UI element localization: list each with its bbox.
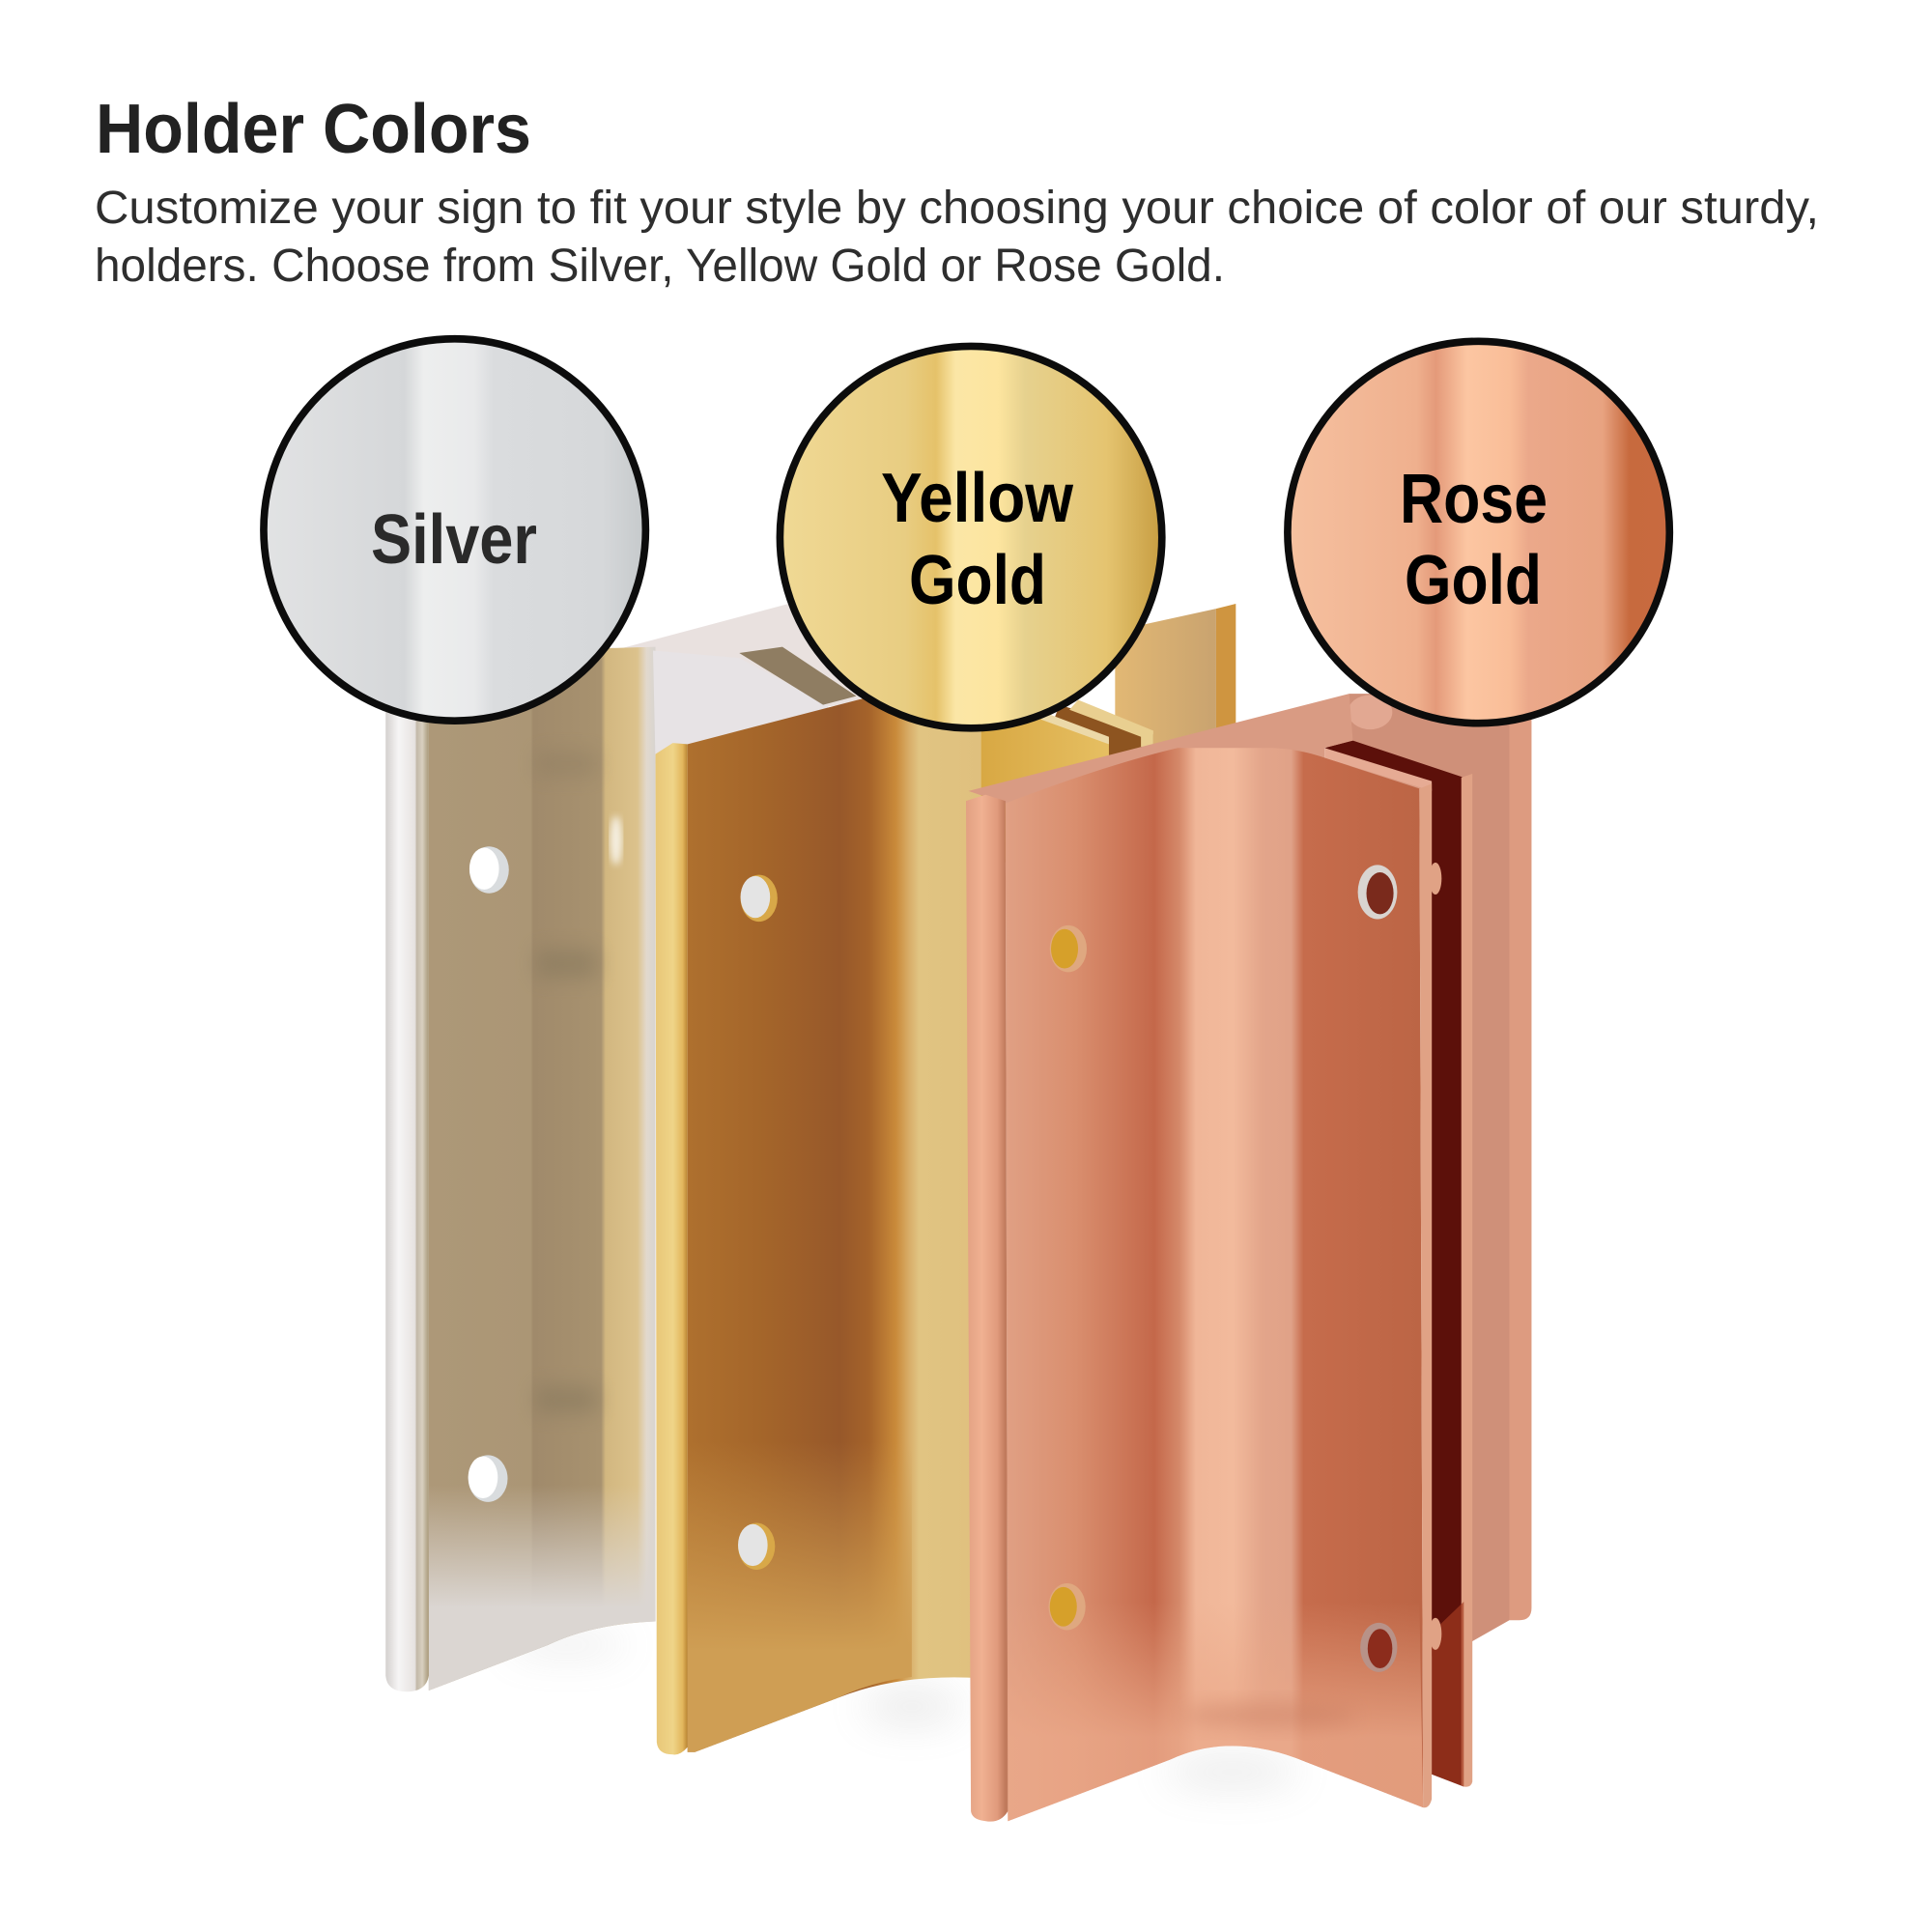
rose side bumps <box>1430 863 1441 1650</box>
rose lower left hole <box>1048 1583 1086 1630</box>
rose lower glow <box>1006 1602 1423 1821</box>
rose front lip <box>1324 748 1432 791</box>
label: silver: Silver <box>371 501 537 579</box>
label: yellow gold <box>881 460 1074 619</box>
rose lower right hole <box>1360 1623 1397 1672</box>
description text: holders. Choose from Silver, Yellow Gold or Rose Gold. <box>95 241 1225 292</box>
yellow upper right panel <box>980 702 1109 863</box>
yellow channel <box>1054 705 1153 761</box>
rose upper right hole <box>1358 865 1397 920</box>
yellow lower glow <box>688 1441 912 1752</box>
yellow front face <box>688 698 980 1752</box>
label: yellow gold: Yellow <box>881 460 1074 537</box>
rose second wing rim <box>1462 774 1472 1787</box>
rose left rim <box>966 795 1008 1822</box>
holder product photo group <box>264 339 1669 1822</box>
yellow gold holder <box>656 604 1236 1754</box>
yellow left rim <box>656 743 688 1754</box>
rose right rim <box>1419 783 1432 1807</box>
silver left rim <box>385 702 429 1691</box>
silver upper hole <box>469 846 509 894</box>
silver inner white wall <box>653 650 828 764</box>
silver lower hole <box>469 1455 508 1502</box>
silver reflection blotches <box>536 752 598 1413</box>
yellow pale edge line <box>1041 712 1109 744</box>
yellow back wing <box>1115 604 1236 813</box>
rose top surface <box>969 694 1430 804</box>
swatch: silver <box>264 339 645 721</box>
description text <box>95 183 1819 292</box>
rose top notch <box>1348 695 1392 729</box>
rose bottom reflection <box>1182 1703 1355 1727</box>
rose dark channel <box>1324 741 1463 1786</box>
yellow lower hole <box>738 1523 775 1570</box>
rose gold holder <box>966 694 1531 1822</box>
description text: Customize your sign to fit your style by choosing your choice of color of our sturdy, <box>95 183 1819 234</box>
rose back panel <box>1324 694 1509 1658</box>
label: yellow gold: Gold <box>909 542 1046 619</box>
rose lower channel glow <box>1432 1602 1463 1786</box>
label: rose gold: Rose <box>1400 461 1548 538</box>
title: Holder Colors <box>96 91 531 168</box>
floor shadows <box>505 1635 1300 1786</box>
swatch: yellow gold <box>780 346 1162 728</box>
yellow upper hole <box>741 875 778 922</box>
silver top surface <box>604 604 863 708</box>
silver highlight <box>610 815 622 865</box>
rose upper left hole <box>1050 925 1087 972</box>
label: rose gold <box>1400 461 1548 619</box>
swatch: rose gold <box>1288 341 1669 724</box>
yellow rim strip <box>1069 699 1153 748</box>
rose back rim <box>1509 694 1531 1620</box>
silver body face <box>429 647 656 1690</box>
silver holder <box>385 604 863 1691</box>
silver slot <box>739 647 856 705</box>
silver lower reflection <box>429 1454 656 1690</box>
rose front face <box>1006 748 1423 1821</box>
label: rose gold: Gold <box>1405 542 1542 619</box>
